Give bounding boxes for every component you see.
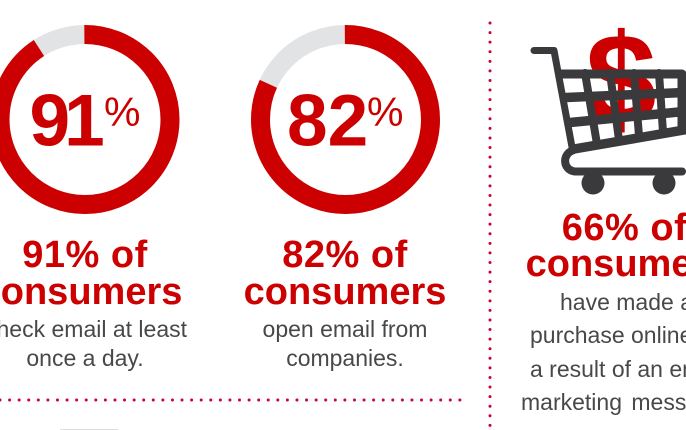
heading: 82% of consumers: 82% of: [282, 234, 408, 276]
text: check email at least once a day: [0, 316, 188, 371]
icon: shopping cart with dollar sign: $: [585, 8, 657, 151]
text: have made a purchase online: [521, 289, 686, 415]
donut value: 91%: %: [104, 89, 140, 135]
heading: 91% of consumers: 91% of: [22, 234, 148, 276]
donut value: 91%: [30, 80, 140, 162]
text: open email from companies: companies.: [286, 345, 404, 371]
icon: shopping cart with dollar sign: [534, 8, 684, 194]
heading: 91% of consumers: [0, 234, 182, 313]
donut value: 82%: [287, 80, 403, 162]
text: open email from companies: [263, 316, 427, 371]
heading: 82% of consumers: consumers: [244, 271, 446, 313]
donut value: 91%: 91: [30, 80, 103, 162]
donut chart: 91%: [0, 34, 170, 204]
heading: 66% of consumers: 66% of: [562, 207, 686, 249]
panel: 66% stat: [521, 8, 686, 415]
panel: 82% stat: [244, 34, 446, 371]
text: open email from companies: open email from: [263, 316, 427, 342]
divider: horizontal dotted line: [0, 398, 464, 402]
heading: 82% of consumers: [244, 234, 446, 313]
donut value: 82%: 82: [287, 80, 368, 162]
divider: vertical dotted line: [488, 23, 492, 430]
heading: 66% of consumers: [526, 207, 686, 285]
partial graphic edge at bottom: [60, 428, 118, 430]
donut chart: 82%: [260, 34, 430, 204]
panel: 91% stat: [0, 34, 188, 371]
text: check email at least once a day: once a day.: [26, 345, 144, 371]
donut value: 82%: %: [367, 89, 403, 135]
